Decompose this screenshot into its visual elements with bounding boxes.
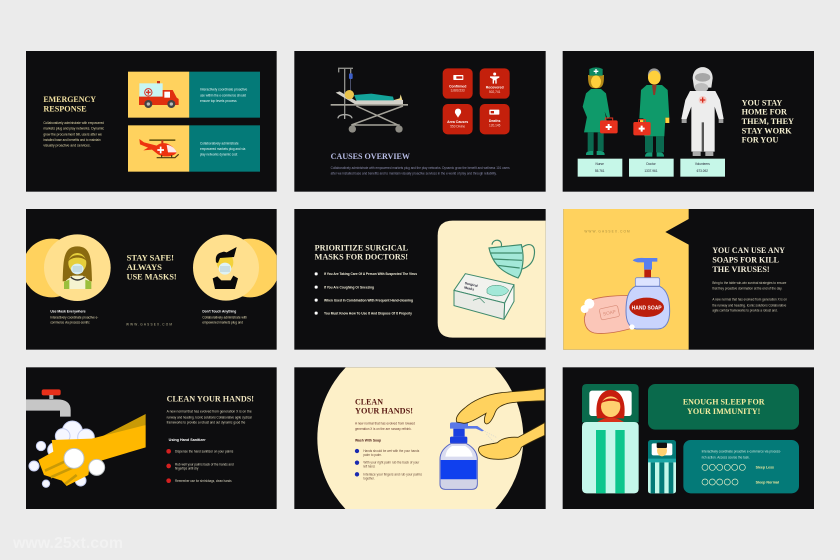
panel: soaps bbox=[563, 209, 814, 350]
text block: soap description: that they proactive domination at the end of the day. bbox=[712, 286, 782, 290]
stat card: area causes bbox=[443, 104, 473, 134]
subheading: wash with soap: Wash With Soap bbox=[355, 439, 381, 443]
heading: you stay home: HOME FOR bbox=[742, 108, 788, 117]
heading: use any soaps bbox=[712, 246, 785, 274]
text block: soap description: Bring to the table win-win survival strategies to ensure bbox=[712, 281, 787, 285]
icon: hand soap bottle bbox=[626, 258, 670, 330]
text block: ambulance note bbox=[200, 88, 248, 103]
label: volunteers count bbox=[680, 159, 725, 177]
label: doctor count: 1337.961 bbox=[644, 169, 658, 173]
label: nurse count: Nurse bbox=[595, 162, 604, 166]
figure: nurse bbox=[583, 67, 618, 155]
text block: use mask everywhere: commerce via process-centric bbox=[50, 320, 90, 324]
stat card: confirmed: 3,889,533 bbox=[451, 89, 465, 93]
label: doctor count bbox=[629, 159, 674, 177]
text block: dont touch anything: empowered markets plug and bbox=[202, 320, 243, 324]
heading: you stay home: THEM, THEY bbox=[742, 117, 794, 126]
stat card: deaths bbox=[480, 104, 510, 134]
text block: soap intro bbox=[355, 421, 415, 431]
text block: emergency intro: installed base and benefits and to maintain bbox=[43, 138, 101, 142]
icon: mask box: Masks bbox=[464, 285, 475, 292]
heading: you stay home bbox=[742, 98, 794, 145]
heading: prioritize surgical masks: MASKS FOR DOCTORS! bbox=[315, 253, 408, 262]
text block: sleep description: Interactively coordinate proactive e-commerce via process- bbox=[702, 450, 781, 454]
text block: causes description: after we installed base and benefits and to maintain visually proactive services in the e-world of play and through reliability. bbox=[331, 172, 497, 176]
icon: doctor medical bag bbox=[633, 120, 651, 135]
steps list: Rub well your palms back of the hands and bbox=[175, 462, 234, 466]
icon: mask box: Surgical bbox=[464, 281, 478, 288]
icon: nurse medical bag bbox=[600, 118, 618, 133]
card: sleep ratings: Sleep Less bbox=[756, 466, 774, 470]
text block: use mask everywhere: Interactively coordinate proactive e- bbox=[50, 316, 98, 320]
steps list: Dispense the hand sanitizer on your palms bbox=[175, 450, 234, 454]
steps list bbox=[355, 449, 422, 480]
heading: clean your hands bbox=[355, 397, 413, 416]
heading: clean your hands: CLEAN bbox=[355, 397, 383, 406]
illustration: man sleeping in bed bbox=[648, 440, 676, 493]
heading: clean your hands: CLEAN YOUR HANDS! bbox=[167, 394, 254, 403]
card: sleep ratings: Sleep Normal bbox=[756, 480, 779, 484]
text block: sleep description: rich action. Access course the task. bbox=[702, 455, 750, 459]
steps list: With your right palm rub the back of your bbox=[363, 461, 419, 465]
heading: you stay home: FOR YOU bbox=[742, 136, 778, 145]
icon: soap bar bbox=[581, 296, 636, 333]
figure: doctor bbox=[633, 68, 669, 157]
heading: emergency response: RESPONSE bbox=[43, 104, 87, 113]
heading: you stay home: STAY WORK bbox=[742, 126, 792, 135]
text block: hands description: frameworks to provide a robust and out dynamic good the bbox=[167, 421, 246, 425]
panel: emergency response bbox=[26, 51, 277, 192]
icon: mask box bbox=[454, 274, 514, 319]
illustration: hands washing with soap bbox=[29, 414, 146, 487]
panel: surgical masks bbox=[294, 209, 546, 350]
text block: soap intro: A new normal that has evolved from Ioweed bbox=[355, 421, 415, 425]
stat card: confirmed: Confirmed bbox=[449, 84, 466, 88]
text block: emergency intro: grow the procurement bill, users after we bbox=[43, 132, 102, 136]
label: volunteers count: Volunteers bbox=[695, 162, 710, 166]
card: enough sleep title bbox=[648, 384, 799, 430]
text block: hands description bbox=[167, 410, 252, 425]
text block: hands description: runway and heading. Iconic solutions Collaborative agile cyclical bbox=[167, 415, 252, 419]
text block: ambulance note: use within the e-commerce should bbox=[200, 93, 246, 97]
card: ambulance bbox=[128, 72, 260, 118]
heading: stay safe bbox=[127, 254, 177, 281]
icon: standing person bbox=[490, 72, 499, 84]
steps list: palm to palm. bbox=[363, 453, 382, 457]
panel: enough sleep bbox=[563, 367, 814, 509]
subheading: using hand sanitizer: Using Hand Sanitizer bbox=[169, 438, 206, 442]
heading: you stay home: YOU STAY bbox=[742, 98, 782, 107]
text block: sleep description bbox=[702, 450, 781, 459]
bullet list: If You Are Taking Care Of A Person With Suspected The Virus bbox=[324, 272, 417, 276]
stat card: recovered bbox=[480, 68, 510, 99]
stat card: deaths: 120,145 bbox=[489, 124, 501, 128]
stat card: area causes: 550 Divine bbox=[450, 124, 465, 128]
bullet list: If You Are Coughing Or Sneezing bbox=[324, 285, 374, 289]
icon: man with mask bbox=[213, 247, 238, 289]
bullet list bbox=[315, 272, 417, 315]
bullet list: You Must Know How To Use It And Dispose Of It Properly bbox=[324, 311, 412, 315]
text block: use mask everywhere bbox=[50, 310, 98, 324]
card: enough sleep title: YOUR IMMUNITY! bbox=[687, 407, 761, 416]
illustration: patient on stretcher bbox=[331, 68, 408, 133]
text block: dont touch anything: Collaboratively administrate with bbox=[202, 316, 247, 320]
icon: surgical mask bbox=[489, 240, 534, 278]
heading: causes overview: CAUSES OVERVIEW bbox=[331, 152, 411, 161]
label: volunteers count: 673.092 bbox=[697, 169, 708, 173]
text block: helicopter note: Collaboratively administrate bbox=[200, 141, 239, 145]
icon: map pin bbox=[455, 109, 461, 118]
icon: upper hand bbox=[456, 388, 545, 424]
icon: soap dispenser bottle bbox=[440, 422, 496, 489]
rating icons: sleep normal bbox=[702, 479, 738, 485]
label: nurse count: 55.761 bbox=[595, 169, 605, 173]
heading: use any soaps: SOAPS FOR KILL bbox=[712, 255, 779, 264]
steps list bbox=[166, 449, 234, 483]
text block: dont touch anything: Don't Touch Anything bbox=[202, 310, 236, 314]
heading: clean your hands: YOUR HANDS! bbox=[355, 407, 413, 416]
label: nurse count bbox=[578, 159, 622, 177]
text block: dont touch anything bbox=[202, 310, 247, 324]
illustration: woman sleeping in bed bbox=[582, 384, 639, 493]
icon: hand soap bottle: HAND SOAP bbox=[632, 305, 662, 311]
card: sleep ratings bbox=[683, 440, 799, 493]
text block: soap description: the runway and heading. Iconic solutions Collaborative bbox=[712, 303, 787, 307]
icon: ambulance bbox=[139, 81, 179, 108]
heading: emergency response: EMERGENCY bbox=[43, 95, 96, 104]
card: helicopter bbox=[128, 125, 260, 172]
text block: emergency intro bbox=[43, 121, 104, 147]
icon: woman with mask bbox=[63, 246, 92, 289]
panel: causes overview bbox=[294, 51, 546, 192]
heading: stay safe: ALWAYS bbox=[127, 263, 162, 272]
text block: ambulance note: ensure top levels process bbox=[200, 99, 237, 103]
steps list: Hands should be wet with the your hands bbox=[363, 449, 420, 453]
text block: soap description bbox=[712, 281, 787, 313]
heading: use any soaps: YOU CAN USE ANY bbox=[712, 246, 785, 255]
figure: volunteer in protective suit bbox=[681, 67, 724, 156]
steps list: Interlace your fingers and rub your palms bbox=[363, 472, 422, 476]
watermark: www.25xt.com bbox=[12, 535, 123, 552]
text block: emergency intro: Collaboratively administrate with empowered bbox=[43, 121, 104, 125]
text block: causes description bbox=[331, 166, 510, 176]
heading: prioritize surgical masks bbox=[315, 243, 408, 262]
text block: helicopter note: play networks dynamic cost bbox=[200, 153, 237, 157]
text block: hands description: A new normal that has evolved from generation X is on the bbox=[167, 410, 252, 414]
icon: water faucet bbox=[26, 389, 71, 417]
icon: helicopter bbox=[139, 139, 179, 158]
heading: emergency response bbox=[43, 95, 96, 113]
steps list: left hand. bbox=[363, 464, 375, 468]
card: enough sleep title: ENOUGH SLEEP FOR bbox=[683, 398, 765, 407]
heading: stay safe: USE MASKS! bbox=[127, 272, 177, 281]
stat card: area causes: Area Causes bbox=[447, 120, 468, 124]
panel: you stay home bbox=[563, 51, 814, 192]
steps list: together. bbox=[363, 476, 375, 480]
cream illustration panel bbox=[438, 221, 546, 338]
stat card: confirmed bbox=[443, 68, 473, 99]
icon: confirmed beds bbox=[453, 75, 463, 80]
stat card: deaths: Deaths bbox=[489, 119, 501, 123]
label: doctor count: Doctor bbox=[646, 162, 656, 166]
steps list: Remember use for shrinkbags, clean hands bbox=[175, 479, 232, 483]
text block: helicopter note: empowered markets plug and via bbox=[200, 147, 246, 151]
text block: helicopter note bbox=[200, 141, 246, 157]
stat card: recovered: 502,741 bbox=[489, 90, 501, 94]
heading: prioritize surgical masks: PRIORITIZE SURGICAL bbox=[315, 243, 408, 252]
text block: use mask everywhere: Use Mask Everywhere bbox=[50, 310, 86, 314]
text block: soap description: A new normal that has evolved from generation X is on bbox=[712, 298, 787, 302]
bullet list: When Used In Combination With Frequent Hand-cleaning bbox=[324, 298, 413, 302]
slide overview grid bbox=[26, 51, 814, 509]
panel: clean your hands dark bbox=[26, 367, 277, 509]
yellow panel with notch bbox=[563, 209, 689, 350]
text block: emergency intro: markets plug and play networks. Dynamic bbox=[43, 127, 104, 131]
steps list: fingertips until dry bbox=[175, 467, 199, 471]
panel: wash with soap cream bbox=[294, 367, 546, 509]
text block: emergency intro: visually proactive and services. bbox=[43, 143, 91, 147]
icon: lower hand bbox=[479, 423, 545, 459]
website link: WWW.GASSEX.COM bbox=[584, 229, 630, 233]
heading: stay safe: STAY SAFE! bbox=[127, 254, 174, 263]
text block: soap description: agile corridor frameworks to provide a robust and. bbox=[712, 309, 778, 313]
rating icons: sleep less bbox=[702, 464, 745, 470]
text block: causes description: Collaboratively administrate with empowered markets plug and the play networks. Dynamic grow the benefit and wellness 101 users bbox=[331, 166, 510, 170]
heading: use any soaps: THE VIRUSES! bbox=[712, 265, 770, 274]
panel: stay safe masks bbox=[22, 209, 279, 350]
stat card: recovered: Recovered bbox=[486, 85, 504, 89]
text block: ambulance note: Interactively coordinate proactive bbox=[200, 88, 248, 92]
text block: soap intro: generation X is on the are runway rethink. bbox=[355, 427, 412, 431]
cream circle bbox=[317, 367, 524, 509]
website link: WWW.GASSEX.COM bbox=[126, 322, 172, 326]
icon: hospital bed bbox=[489, 110, 499, 115]
icon: soap bar: SOAP bbox=[603, 309, 616, 317]
